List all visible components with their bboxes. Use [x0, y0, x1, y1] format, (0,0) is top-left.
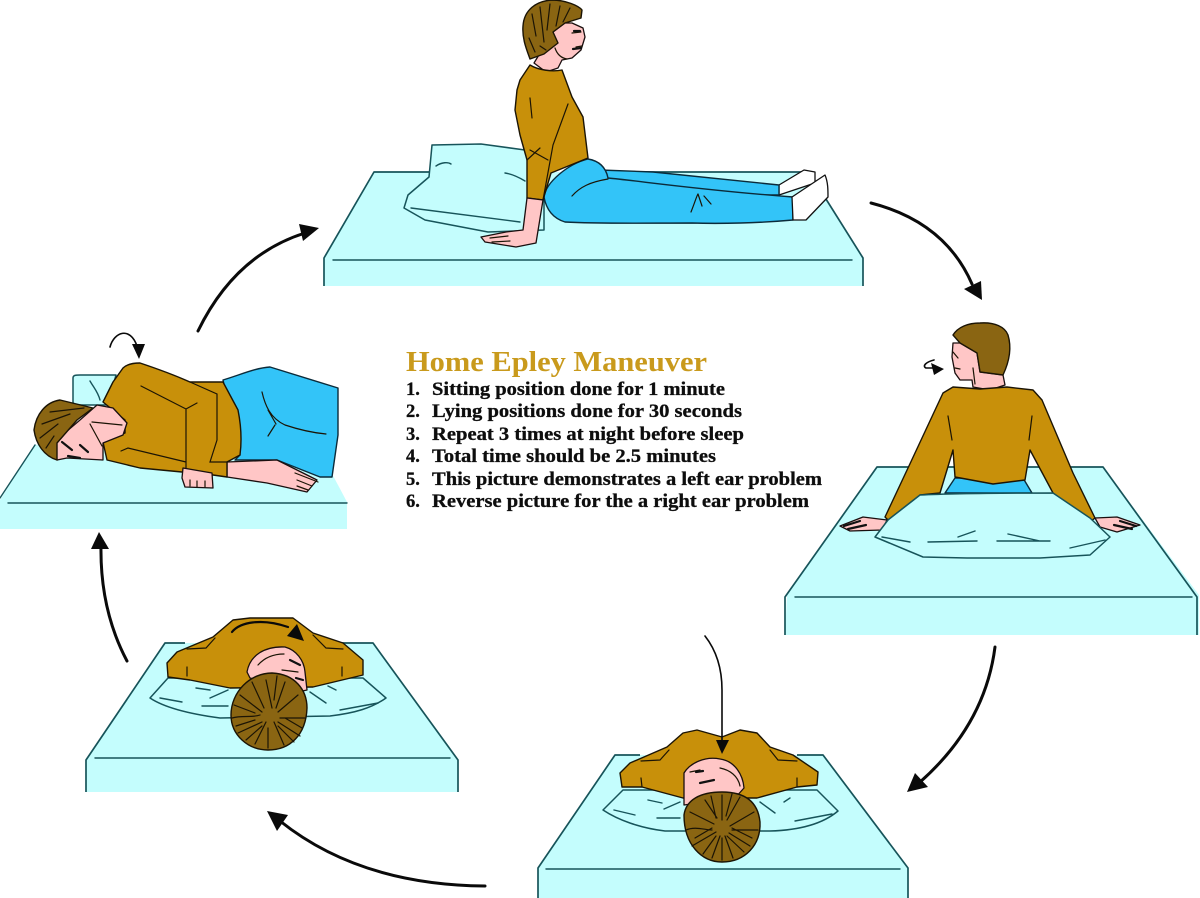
- arrow: step 3 to step 4: [267, 811, 485, 886]
- face: [684, 758, 744, 805]
- pillow: step 3: [603, 790, 838, 831]
- person: on back, head toward viewer: [620, 730, 818, 862]
- left hand: [840, 517, 887, 531]
- panel: step 4 lying back, head turned right: [86, 618, 458, 792]
- instruction 3: 3.: [406, 425, 420, 445]
- face and neck: [53, 405, 127, 460]
- instruction 1: 1.: [406, 380, 420, 400]
- arrow: step 5 to step 1: [198, 224, 319, 331]
- back sock: [779, 170, 815, 195]
- text block: title and instructions: [406, 347, 823, 512]
- instruction 5: This picture demonstrates a left ear problem: [432, 470, 823, 490]
- mattress: step 5: [0, 440, 347, 529]
- sweater: [515, 65, 588, 200]
- panel: step 3 lying back, head turned left: [538, 636, 908, 898]
- sweater: [167, 618, 363, 688]
- panel: step 2 head turned left: [785, 323, 1199, 635]
- mattress: step 3: [538, 755, 908, 898]
- mattress: step 4: [86, 643, 458, 792]
- pillow: step 1: [404, 144, 544, 232]
- arrow: step 2 to step 3: [907, 647, 995, 792]
- instruction 2: Lying positions done for 30 seconds: [432, 402, 742, 422]
- front sock: [792, 175, 828, 220]
- jeans: [223, 367, 338, 477]
- arrow: step 4 to step 5: [91, 532, 127, 661]
- face: [247, 647, 307, 692]
- mattress: step 2: [785, 467, 1199, 635]
- fist: [182, 468, 213, 488]
- panel: step 1 sitting upright: [324, 0, 863, 286]
- neck and face: [952, 343, 1005, 390]
- instruction 3: Repeat 3 times at night before sleep: [432, 425, 744, 445]
- hair: [523, 0, 582, 59]
- arrow: downward rotation arrow: [705, 636, 729, 754]
- person: back view: [840, 323, 1140, 558]
- panel: step 5 lying on side: [0, 333, 347, 529]
- instruction 2: 2.: [406, 402, 420, 422]
- arm and hand: [481, 198, 543, 247]
- sweater: [103, 363, 241, 477]
- instruction 6: Reverse picture for the a right ear problem: [432, 492, 810, 512]
- back leg: [600, 170, 779, 195]
- sweater: [620, 730, 818, 798]
- instruction 6: 6.: [406, 492, 420, 512]
- arrow: step 1 to step 2: [871, 203, 982, 300]
- arrow: roll-over rotation arrow: [110, 333, 145, 359]
- front leg and hip: [544, 159, 793, 223]
- instruction 1: Sitting position done for 1 minute: [432, 380, 725, 400]
- pillow: step 5: [73, 375, 116, 405]
- hair: [684, 792, 760, 862]
- instruction 4: 4.: [406, 447, 420, 467]
- instruction 4: Total time should be 2.5 minutes: [432, 447, 716, 467]
- person: on side facing down: [34, 363, 338, 492]
- pillow: step 4: [150, 678, 386, 718]
- instruction 5: 5.: [406, 470, 420, 490]
- arrow: head rotation arrow on shoulders: [232, 622, 304, 641]
- icon: head rotation arrow: [924, 360, 944, 375]
- forearm and hand: [227, 460, 317, 492]
- sweater: [885, 387, 1095, 522]
- neck and face: [534, 23, 585, 72]
- hair: [953, 323, 1010, 375]
- title: Home Epley Maneuver: [406, 347, 707, 378]
- hair: [231, 673, 307, 750]
- person: on back, head toward viewer: [167, 618, 363, 750]
- jeans waist: [945, 478, 1032, 493]
- person: seated profile: [481, 0, 828, 247]
- pillow: [875, 493, 1110, 558]
- right hand: [1095, 517, 1140, 532]
- hair: [34, 400, 93, 460]
- mattress: step 1: [324, 172, 863, 286]
